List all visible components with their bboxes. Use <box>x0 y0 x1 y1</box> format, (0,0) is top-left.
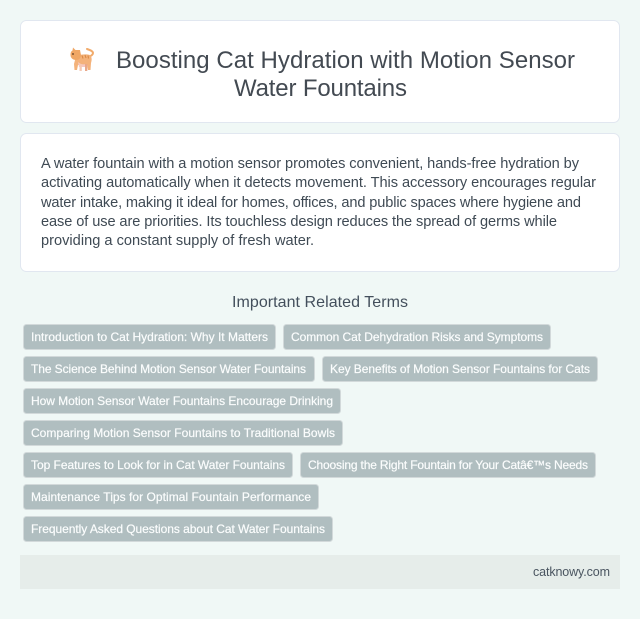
tag: Introduction to Cat Hydration: Why It Matters <box>31 330 268 344</box>
panel: title card <box>20 20 620 122</box>
title <box>116 47 575 102</box>
tag: Common Cat Dehydration Risks and Symptoms <box>291 330 543 344</box>
tag: Choosing the Right Fountain for Your Catâ€™s Needs <box>308 458 588 472</box>
tag: Comparing Motion Sensor Fountains to Traditional Bowls <box>31 426 335 440</box>
tag <box>24 388 340 414</box>
tag: Frequently Asked Questions about Cat Water Fountains <box>31 522 325 536</box>
tag: Maintenance Tips for Optimal Fountain Performance <box>31 490 311 504</box>
panel: description: activating automatically when it detects movement. This accessory encourages regular <box>41 175 596 191</box>
tag list <box>24 324 598 542</box>
tag: Top Features to Look for in Cat Water Fountains <box>31 458 285 472</box>
title: Water Fountains <box>234 75 407 102</box>
title: Boosting Cat Hydration with Motion Sensor <box>116 47 575 74</box>
tag: Key Benefits of Motion Sensor Fountains for Cats <box>330 362 590 376</box>
tag <box>24 324 276 350</box>
panel: description: water intake, making it ideal for homes, offices, and public spaces where hygiene and <box>40 195 581 211</box>
tag <box>24 420 342 446</box>
heading: related terms: Important Related Terms <box>232 294 408 311</box>
tag <box>284 324 550 350</box>
panel: description <box>20 134 620 272</box>
panel: description: ease of use are priorities. Its touchless design reduces the spread of germs while <box>41 214 557 230</box>
tag <box>322 356 598 382</box>
tag: How Motion Sensor Water Fountains Encourage Drinking <box>31 394 333 408</box>
tag <box>24 484 318 510</box>
tag: The Science Behind Motion Sensor Water Fountains <box>31 362 306 376</box>
tag <box>24 516 332 542</box>
panel: description: providing a constant supply of fresh water. <box>41 233 314 249</box>
footer: catknowy.com <box>533 565 610 579</box>
tag <box>24 452 292 478</box>
tag <box>24 356 314 382</box>
tag <box>300 452 596 478</box>
panel: description: A water fountain with a motion sensor promotes convenient, hands-free hydration by <box>41 156 580 172</box>
icon: cat <box>70 48 93 71</box>
footer <box>20 555 620 589</box>
